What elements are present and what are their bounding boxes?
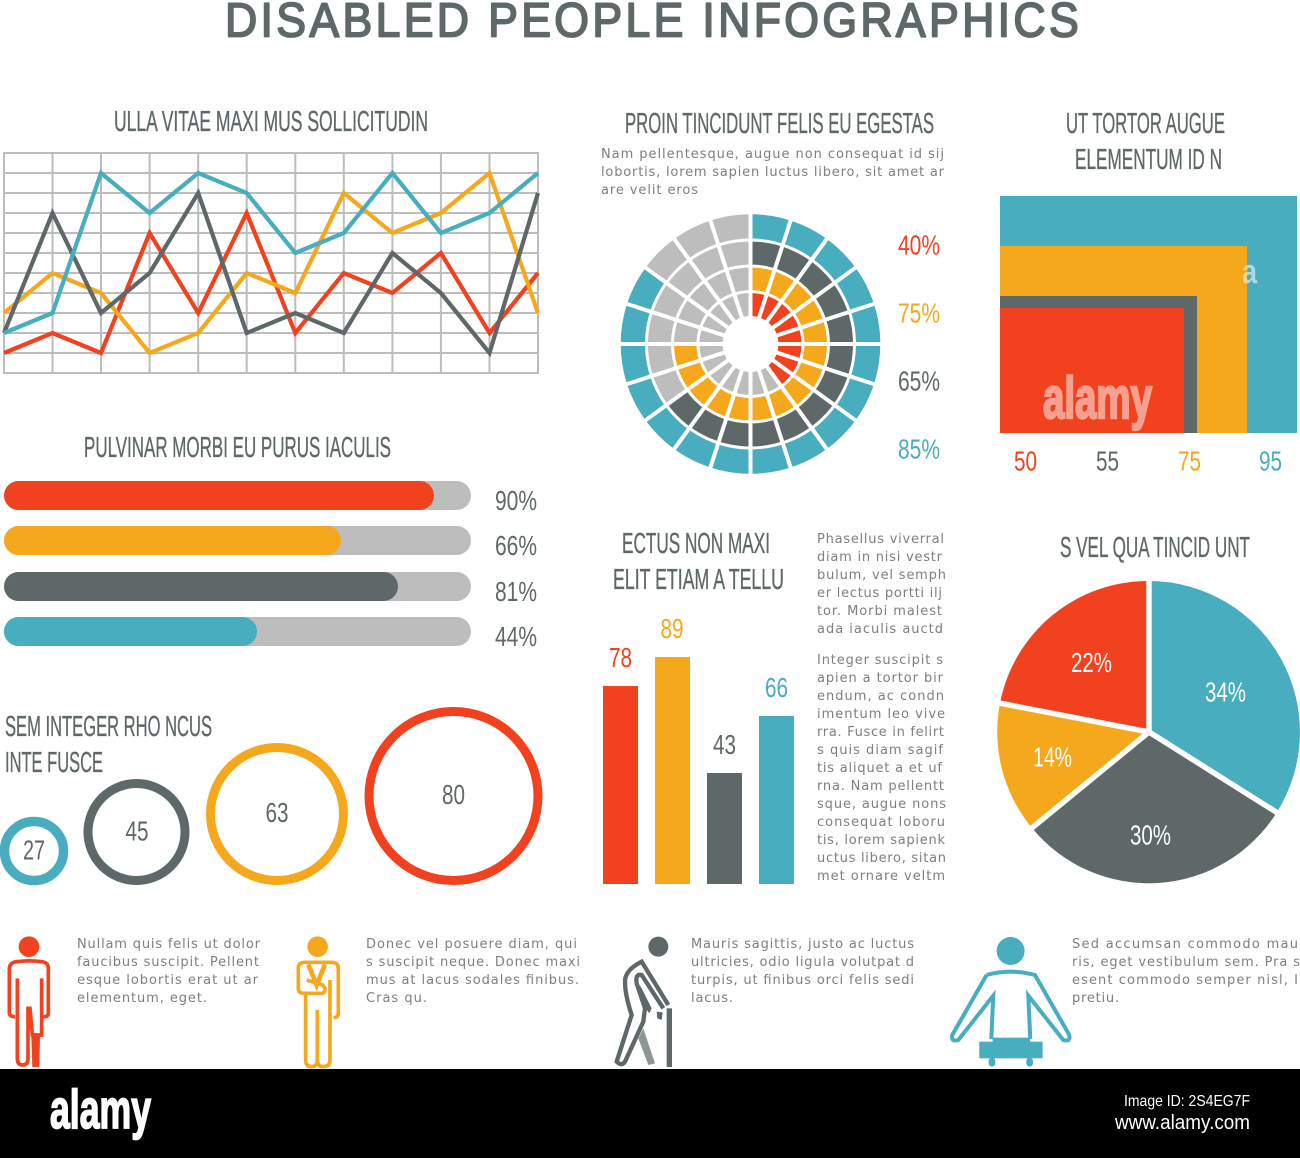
icon: person in wheelchair	[952, 937, 1069, 1067]
text block: person one: Nullam quis felis ut dolor	[77, 937, 261, 952]
footer url: www.alamy.com	[1114, 1112, 1250, 1134]
text block: column paragraph one: tor. Morbi malest	[817, 604, 942, 619]
heading: radial chart: PROIN TINCIDUNT FELIS EU EGESTAS	[625, 108, 934, 140]
heading: ring circles: INTE FUSCE	[5, 747, 103, 779]
text block: column paragraph two: endum, ac condn	[817, 689, 944, 704]
text block: radial intro: lobortis, lorem sapien luctus libero, sit amet ar	[601, 165, 945, 180]
text block: person two	[366, 937, 580, 1006]
text block: column paragraph two: rra. Fusce in felirt	[817, 725, 944, 740]
heading: nested squares	[1066, 108, 1225, 176]
text block: person four: ris, eget vestibulum sem. Pra s	[1072, 955, 1300, 970]
text block: person four	[1072, 937, 1300, 1006]
pie slice: orange 14%: 14%	[1033, 742, 1072, 772]
radial labels	[898, 230, 940, 464]
text block: person three: Mauris sagittis, justo ac luctus	[691, 937, 914, 952]
ring: 80	[369, 712, 538, 880]
square labels: 75	[1178, 446, 1201, 476]
text block: person four: pretiu.	[1072, 991, 1119, 1006]
heading: column chart: ELIT ETIAM A TELLU	[613, 564, 784, 596]
square: red 50	[1000, 308, 1184, 433]
ring: 27: 27	[23, 834, 45, 866]
text block: column paragraph two: tis aliquet a et uf	[817, 761, 942, 776]
text block: person three: ultricies, odio ligula volutpat d	[691, 955, 914, 970]
footer logo: alamy	[50, 1078, 151, 1140]
footer bar	[0, 1069, 1300, 1158]
bar: 66%	[4, 526, 537, 561]
ring: 45	[88, 784, 185, 880]
text block: column paragraph two: s quis diam sagif	[817, 743, 943, 758]
text block: column paragraph two: rna. Nam pellentt	[817, 779, 944, 794]
text block: person two: Cras qu.	[366, 991, 427, 1006]
icon: person with cane	[617, 937, 672, 1067]
square: teal 95	[1000, 196, 1297, 433]
line series: red	[4, 213, 538, 353]
text block: column paragraph two: uctus libero, sitan	[817, 851, 946, 866]
square: gray 55	[1000, 296, 1197, 433]
bar: 81%: 81%	[495, 576, 537, 607]
pie slice: orange 14%	[997, 703, 1149, 828]
text block: person four: Sed accumsan commodo mau	[1072, 937, 1298, 952]
text block: person one: faucibus suscipit. Pellent	[77, 955, 259, 970]
radial segmented rings	[614, 208, 886, 480]
text block: column paragraph two: Integer suscipit s	[817, 653, 943, 668]
watermark: alamy	[1043, 366, 1152, 431]
text block: person two: s suscipit neque. Donec maxi	[366, 955, 580, 970]
bar: 90%	[4, 481, 537, 516]
text block: radial intro: Nam pellentesque, augue non consequat id sij	[601, 147, 944, 162]
panel: pie chart	[994, 532, 1300, 883]
square labels: 95	[1259, 446, 1282, 476]
bar: 66%: 66%	[495, 530, 537, 561]
square: orange 75	[1000, 246, 1247, 433]
text block: column paragraph two: consequat loboru	[817, 815, 945, 830]
square labels	[1014, 446, 1282, 476]
radial labels: 85%	[898, 434, 940, 464]
column: 66	[759, 672, 794, 884]
pie slice: gray 30%: 30%	[1130, 820, 1171, 850]
text block: person four: esent commodo semper nisl, I	[1072, 973, 1298, 988]
text block: column paragraph one: diam in nisi vestr	[817, 550, 943, 565]
bar: 81%	[4, 572, 537, 607]
column: 78	[603, 642, 638, 884]
panel: red person	[9, 936, 261, 1067]
text block: person one	[77, 937, 261, 1006]
pie slice: red 22%	[1000, 581, 1149, 732]
panel: nested squares	[1000, 108, 1297, 476]
pie slice: gray 30%	[1032, 732, 1277, 883]
radial labels: 65%	[898, 366, 940, 396]
panel: progress bars	[4, 432, 537, 652]
text block: radial intro	[601, 147, 945, 198]
icon: amputee person	[9, 936, 48, 1067]
column: 43	[707, 729, 742, 884]
bar: 44%	[4, 617, 537, 652]
text block: person three: turpis, ut finibus orci felis sedi	[691, 973, 914, 988]
square labels: 55	[1096, 446, 1119, 476]
panel: line chart	[4, 106, 538, 373]
ring: 63: 63	[266, 797, 288, 828]
panel: orange person	[298, 936, 580, 1067]
text block: column paragraph two: tis, lorem sapienk	[817, 833, 945, 848]
panel: radial chart	[601, 108, 945, 480]
text block: column paragraph one: Phasellus viverral	[817, 532, 944, 547]
text block: column paragraph one: bulum, vel semph	[817, 568, 946, 583]
radial labels: 75%	[898, 298, 940, 328]
text block: column paragraph two: apien a tortor bir	[817, 671, 944, 686]
text block: person one: esque lobortis erat ut ar	[77, 973, 259, 988]
text block: person one: elementum, eget.	[77, 991, 207, 1006]
heading: ring circles	[5, 711, 212, 779]
panel: teal person	[952, 937, 1300, 1067]
ring: 80: 80	[442, 779, 465, 810]
panel: column chart	[603, 528, 794, 884]
bar: 90%: 90%	[495, 485, 537, 516]
text block: column paragraph two	[817, 653, 946, 884]
text block: person two: Donec vel posuere diam, qui	[366, 937, 577, 952]
text block: column paragraph one: ada iaculis auctd	[817, 622, 943, 637]
text block: person two: mus at lacus sodales finibus.	[366, 973, 579, 988]
pie slice: teal 34%	[1149, 581, 1300, 812]
pie slice: red 22%: 22%	[1071, 647, 1112, 678]
column: 89	[655, 613, 690, 884]
footer image id: Image ID: 2S4EG7F	[1124, 1093, 1250, 1110]
text block: column paragraph two: sque, augue nons	[817, 797, 946, 812]
text block: column paragraph two: imentum leo vive	[817, 707, 945, 722]
radial labels: 40%	[898, 230, 940, 260]
heading: column chart	[613, 528, 784, 596]
text block: column paragraph one: er lectus portti ilj	[817, 586, 942, 601]
text block: person three	[691, 937, 914, 1006]
square labels: 50	[1014, 446, 1037, 476]
text block: radial intro: are velit eros	[601, 183, 698, 198]
text block: person three: lacus.	[691, 991, 733, 1006]
text block: column paragraph two: met ornare veltm	[817, 869, 945, 884]
heading: progress bars: PULVINAR MORBI EU PURUS IACULIS	[84, 432, 391, 464]
text block: column paragraph one	[817, 532, 946, 637]
column: 66: 66	[765, 672, 788, 703]
watermark letter: a	[1242, 253, 1258, 291]
heading: ring circles: SEM INTEGER RHO NCUS	[5, 711, 212, 743]
heading: column chart: ECTUS NON MAXI	[622, 528, 770, 560]
ring: 63	[210, 748, 344, 880]
column: 78: 78	[609, 642, 632, 673]
line series: gray	[4, 193, 538, 353]
line series: teal	[4, 173, 538, 333]
panel: ring circles	[4, 711, 538, 880]
heading: line chart: ULLA VITAE MAXI MUS SOLLICITUDIN	[114, 106, 428, 138]
icon: person with sling	[298, 936, 338, 1067]
pie slice: teal 34%: 34%	[1205, 676, 1246, 708]
bar: 44%: 44%	[495, 621, 537, 652]
column: 43: 43	[713, 729, 736, 760]
panel: gray person	[617, 937, 914, 1067]
ring: 45: 45	[126, 816, 148, 846]
ring: 27	[4, 822, 64, 880]
column: 89: 89	[660, 613, 684, 644]
line series: orange	[4, 173, 538, 353]
